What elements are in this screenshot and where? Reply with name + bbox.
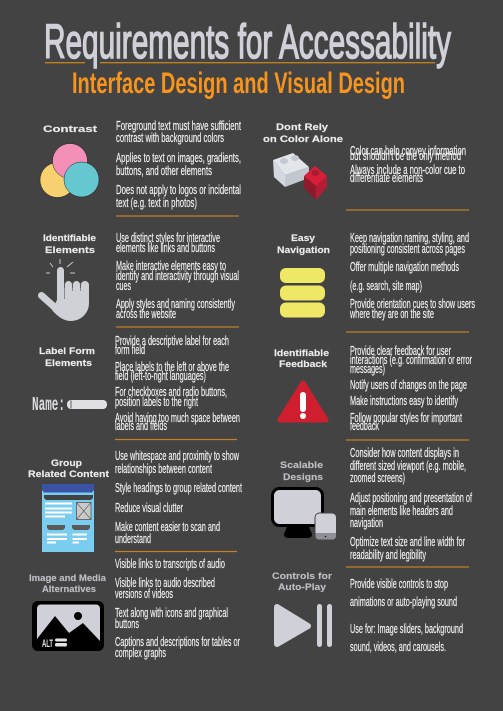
text: media alternatives requirements (115, 557, 240, 660)
text: navigation requirements: where they are on the site (349, 307, 434, 321)
heading: controls for auto-play (272, 571, 332, 593)
text: grouping requirements (115, 449, 242, 546)
heading: image and media alternatives (29, 573, 107, 595)
panel: contrast (40, 119, 241, 210)
heading: group related content: Group (51, 458, 82, 469)
text: navigation requirements: (e.g. search, site map) (350, 279, 422, 293)
heading: label form elements (39, 346, 95, 369)
heading: group related content (28, 458, 110, 480)
text: contrast requirements: Does not apply to logos or incidental (116, 183, 241, 197)
heading: easy navigation: Easy (291, 233, 316, 244)
heading: contrast: Contrast (43, 124, 98, 135)
heading: dont rely on color alone: on Color Alone (263, 134, 343, 145)
heading: identifiable elements: Identifiable (43, 233, 96, 244)
text: identifiable element requirements: Use distinct styles for interactive (116, 231, 220, 245)
heading: image and media alternatives: Image and Media (29, 573, 107, 584)
heading: dont rely on color alone (263, 122, 343, 145)
text: scalable design requirements: readability and legibility (350, 548, 426, 562)
text: scalable design requirements (350, 446, 472, 562)
text: grouping requirements: Reduce visual clutter (115, 501, 183, 515)
panel: scalable designs (272, 446, 472, 562)
panel: label form elements (32, 334, 240, 433)
text: contrast requirements: Foreground text must have sufficient (116, 119, 241, 133)
heading: identifiable elements (43, 233, 96, 256)
panel: identifiable elements (42, 231, 239, 321)
text: identifiable element requirements: identify and interactivity through visual (116, 269, 239, 283)
icon: name form field: Name: (32, 394, 65, 416)
text: form label requirements (115, 334, 240, 433)
text: grouping requirements: Use whitespace and proximity to show (115, 449, 240, 463)
text: feedback requirements (350, 344, 472, 433)
text: media alternatives requirements: Visible links to audio described (115, 576, 215, 590)
text: form label requirements: labels and fields (115, 419, 167, 433)
text: contrast requirements (116, 119, 241, 210)
icon: navigation menu (280, 268, 325, 318)
text: color requirements: differentiate elements (350, 171, 423, 185)
heading: scalable designs: Scalable (280, 460, 323, 471)
text: contrast requirements: text (e.g. text in photos) (116, 196, 197, 210)
text: form label requirements: Avoid having too much space between (115, 411, 240, 425)
heading: identifiable elements: Elements (45, 245, 95, 256)
text: identifiable element requirements: cues (116, 279, 131, 293)
text: auto-play requirements (350, 577, 463, 654)
icon: play and pause (277, 604, 332, 647)
text: grouping requirements: Make content easier to scan and (115, 520, 220, 534)
panel: controls for auto-play (272, 571, 463, 654)
text: identifiable element requirements: across the website (116, 307, 176, 321)
text: feedback requirements: messages) (350, 362, 385, 376)
icon: image with alt text: ALT (42, 638, 53, 650)
text: navigation requirements (349, 231, 475, 321)
text: media alternatives requirements: buttons (115, 617, 139, 631)
text: identifiable element requirements: Make interactive elements easy to (116, 259, 226, 273)
panel: group related content (28, 449, 242, 552)
heading: image and media alternatives: Alternatives (42, 584, 96, 595)
text: form label requirements: field (left-to-right languages) (115, 369, 206, 383)
panel: easy navigation (277, 231, 475, 321)
text: media alternatives requirements: Visible links to transcripts of audio (115, 557, 225, 571)
panel: identifiable feedback (274, 344, 472, 433)
text: form label requirements: For checkboxes and radio buttons, (115, 385, 227, 399)
text: grouping requirements: relationships between content (115, 462, 212, 476)
text: contrast requirements: Applies to text on images, gradients, (116, 151, 241, 165)
text: scalable design requirements: navigation (350, 516, 383, 530)
heading: label form elements: Label Form (39, 346, 95, 357)
icon: overlapping colour circles (40, 144, 99, 198)
heading: identifiable feedback (274, 348, 329, 370)
text: grouping requirements: Style headings to group related content (115, 481, 242, 495)
icon: page layout (42, 484, 94, 552)
text: identifiable element requirements: Apply styles and naming consistently (116, 297, 235, 311)
heading: controls for auto-play: Auto-Play (278, 582, 327, 593)
text: media alternatives requirements: Text along with icons and graphical (115, 606, 228, 620)
panel: image and media alternatives (29, 557, 240, 660)
text: identifiable element requirements: elements like links and buttons (116, 241, 215, 255)
heading: dont rely on color alone: Dont Rely (276, 122, 329, 133)
heading: identifiable feedback: Feedback (279, 359, 328, 370)
icon: toy bricks (273, 153, 327, 200)
icon: warning triangle (280, 383, 326, 420)
panel: dont rely on color alone (263, 122, 466, 200)
heading: easy navigation (277, 233, 330, 256)
icon: monitor and tablet (272, 488, 336, 540)
text: form label requirements: Provide a descriptive label for each (115, 334, 229, 348)
text: form label requirements: form field (115, 343, 145, 357)
heading: group related content: Related Content (28, 469, 110, 480)
text: form label requirements: Place labels to the left or above the (115, 360, 229, 374)
text: media alternatives requirements: Captions and descriptions for tables or (115, 635, 240, 649)
heading: label form elements: Elements (45, 358, 92, 369)
text: media alternatives requirements: complex graphs (115, 646, 166, 660)
heading: scalable designs: Designs (283, 472, 323, 483)
heading: controls for auto-play: Controls for (272, 571, 332, 582)
icon: pointing hand (42, 259, 89, 321)
text: identifiable element requirements (116, 231, 239, 321)
text: contrast requirements: buttons, and other elements (116, 164, 212, 178)
text: color requirements (350, 144, 466, 185)
text: scalable design requirements: zoomed screens) (350, 471, 405, 485)
icon: image with alt text (32, 601, 104, 651)
text: form label requirements: position labels to the right (115, 395, 198, 409)
heading: identifiable feedback: Identifiable (274, 348, 329, 359)
text: contrast requirements: contrast with background colors (116, 131, 224, 145)
heading: scalable designs (280, 460, 323, 483)
text: grouping requirements: understand (115, 532, 151, 546)
text: media alternatives requirements: versions of videos (115, 587, 173, 601)
text: feedback requirements: feedback (350, 419, 379, 433)
heading: easy navigation: Navigation (277, 245, 330, 256)
